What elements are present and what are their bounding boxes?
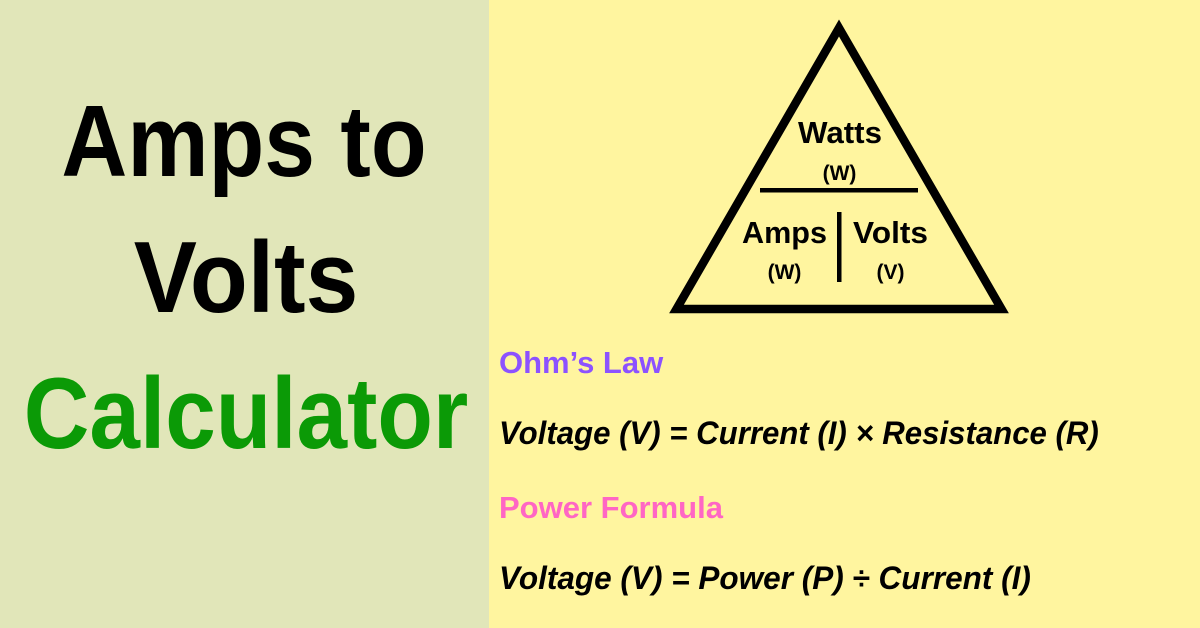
label: Watts: Watts <box>798 115 882 150</box>
title line: Calculator: Calculator <box>23 358 468 470</box>
title line: Amps to: Amps to <box>61 86 427 198</box>
title line: Volts: Volts <box>134 222 358 334</box>
heading: Power Formula: Power Formula <box>499 490 723 525</box>
heading: Ohm's Law: Ohm’s Law <box>499 345 663 380</box>
label: W: (W) <box>823 162 856 185</box>
label: Volts: Volts <box>853 215 928 250</box>
label: Amps unit: (W) <box>768 261 801 284</box>
formula: voltage from current and resistance: Voltage (V) = Current (I) × Resistance (R) <box>499 415 1099 451</box>
triangle outline <box>676 28 1002 309</box>
label: Volts unit: (V) <box>876 261 904 284</box>
panel: left title background <box>0 0 489 628</box>
vertical divider <box>837 212 842 282</box>
label: Amps: Amps <box>742 215 827 250</box>
panel: Ohm's law triangle <box>669 20 1009 314</box>
formula: voltage from power and current: Voltage (V) = Power (P) ÷ Current (I) <box>499 560 1031 596</box>
horizontal divider <box>760 188 918 192</box>
